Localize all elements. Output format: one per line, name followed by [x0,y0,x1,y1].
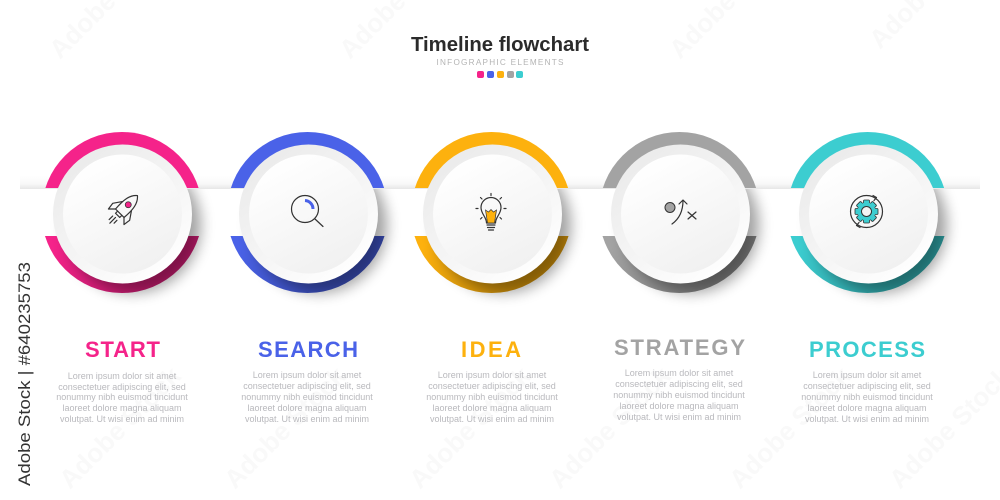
text: search: nonummy nibh euismod tincidunt [241,392,373,402]
text: process: Lorem ipsum dolor sit amet [813,370,922,380]
shadow: start [65,157,201,293]
icon: strategy play [665,200,696,224]
text: search: consectetuer adipiscing elit, sed [243,381,371,391]
text: idea: nonummy nibh euismod tincidunt [426,392,558,402]
text: start: volutpat. Ut wisi enim ad minim [60,414,184,424]
text: strategy [613,368,745,422]
text: process: nonummy nibh euismod tincidunt [801,392,933,402]
ring: start [42,132,202,293]
disc: start [53,144,192,284]
ring: process [787,132,948,293]
label: search: SEARCH [258,337,358,362]
label: process: PROCESS [809,337,925,362]
text: strategy: Lorem ipsum dolor sit amet [625,368,734,378]
ring: idea [411,132,572,293]
text: search: volutpat. Ut wisi enim ad minim [245,414,369,424]
watermark: Adobe Stock [403,360,537,494]
text: idea: Lorem ipsum dolor sit amet [438,370,547,380]
title: Timeline flowchart [411,34,589,56]
disc: process [799,144,938,284]
subtitle: INFOGRAPHIC ELEMENTS [436,58,564,67]
disc: strategy [611,144,750,284]
text: idea: laoreet dolore magna aliquam [432,403,552,413]
text: strategy: laoreet dolore magna aliquam [619,401,739,411]
watermark: Adobe Stock [543,360,677,494]
label: idea: IDEA [461,337,521,362]
text: start: consectetuer adipiscing elit, sed [58,382,186,392]
text: process: laoreet dolore magna aliquam [807,403,927,413]
stock id side text: Adobe Stock | #640235753 [15,262,34,486]
icon: magnifier [292,196,323,226]
icon: gear [850,196,882,228]
text: process [801,370,933,424]
text: search [241,370,373,424]
panel: process [787,132,948,424]
text: start: Lorem ipsum dolor sit amet [68,371,177,381]
text: strategy: consectetuer adipiscing elit, sed [615,379,743,389]
text: search: Lorem ipsum dolor sit amet [253,370,362,380]
icon: rocket [101,187,146,232]
text: search: laoreet dolore magna aliquam [247,403,367,413]
panel: strategy [599,132,760,422]
text: start [56,371,188,424]
shadow: strategy [620,189,768,302]
timeline band [20,176,980,189]
shadow: idea [435,157,571,293]
watermark: Adobe Stock [723,360,857,494]
disc: idea [423,144,562,284]
ring: search [227,132,388,293]
text: start: nonummy nibh euismod tincidunt [56,392,188,402]
text: start: laoreet dolore magna aliquam [62,403,182,413]
text: process: volutpat. Ut wisi enim ad minim [805,414,929,424]
panel: start [42,132,202,424]
text: idea: consectetuer adipiscing elit, sed [428,381,556,391]
panel: idea [411,132,572,424]
watermark: Adobe Stock [53,360,187,494]
shadow: search [251,157,387,293]
label: strategy: STRATEGY [614,335,745,360]
text: strategy: volutpat. Ut wisi enim ad minim [617,412,741,422]
icon: light bulb [476,194,506,230]
watermark: Adobe Stock [218,360,352,494]
colour dots [477,71,523,78]
disc: search [239,144,378,284]
shadow: process [811,157,947,293]
panel: search [227,132,388,424]
text: process: consectetuer adipiscing elit, sed [803,381,931,391]
text: strategy: nonummy nibh euismod tincidunt [613,390,745,400]
text: idea: volutpat. Ut wisi enim ad minim [430,414,554,424]
label: start: START [85,337,161,362]
text: idea [426,370,558,424]
ring: strategy [599,132,760,293]
